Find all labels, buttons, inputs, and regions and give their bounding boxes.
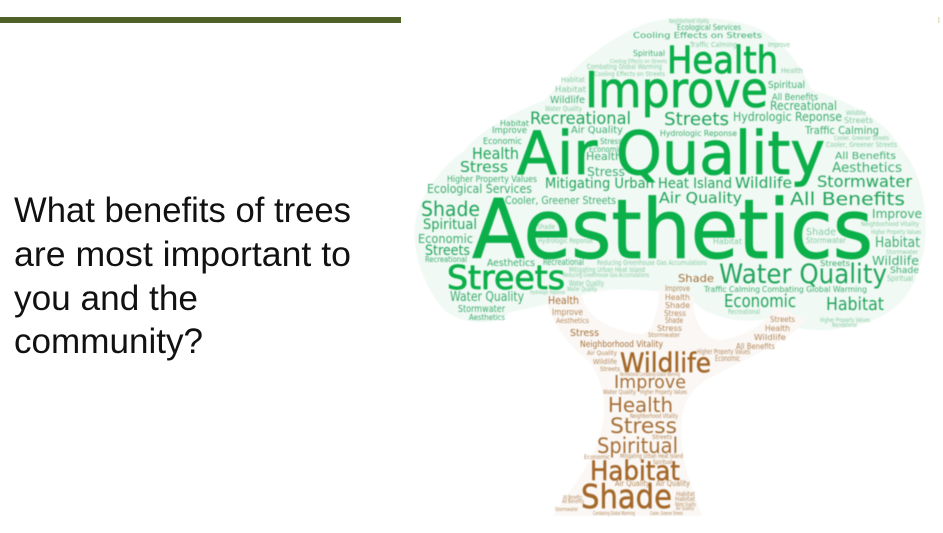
trunk small keywords: Higher Property Values — [640, 389, 687, 396]
canopy secondary keywords: Water Quality — [450, 290, 524, 305]
canopy secondary keywords: Stress — [600, 137, 622, 146]
canopy secondary keywords: Recreational — [425, 255, 467, 264]
canopy secondary keywords: Economic — [483, 137, 522, 147]
canopy small keywords: Recreational — [832, 322, 857, 329]
canopy small keywords: Shade — [806, 227, 836, 238]
canopy secondary keywords: Improve — [492, 126, 527, 136]
trunk small keywords: Combating Global Warming — [593, 511, 635, 517]
trunk small keywords: Air Quality — [587, 350, 617, 357]
canopy medium keywords: Recreational — [530, 109, 631, 129]
canopy secondary keywords: Traffic Calming — [703, 285, 760, 294]
trunk small keywords: Improve — [665, 284, 690, 293]
trunk large keywords: Wildlife — [620, 348, 711, 379]
trunk small keywords: All Benefits — [736, 342, 775, 351]
trunk small keywords: Air Quality — [656, 479, 690, 488]
canopy small keywords: Reducing Greenhouse Gas Accumulations — [597, 259, 707, 267]
canopy small keywords: Spiritual — [887, 274, 913, 283]
trunk small keywords: Economic — [715, 354, 740, 363]
trunk small keywords: Air Quality — [615, 479, 650, 488]
trunk small keywords: Stormwater — [648, 332, 680, 339]
canopy small keywords: Health — [781, 67, 803, 75]
trunk small keywords: Higher Property Values — [697, 348, 750, 356]
canopy secondary keywords: All Benefits — [835, 151, 896, 162]
trunk small keywords: Air Quality — [676, 506, 694, 512]
canopy large keywords — [447, 39, 873, 297]
canopy large keywords: Aesthetics — [472, 183, 873, 278]
canopy large keywords: Streets — [447, 258, 565, 297]
canopy secondary keywords: Higher Property Values — [447, 175, 537, 185]
canopy medium keywords: Wildlife — [735, 174, 792, 192]
trunk large keywords: Habitat — [590, 456, 680, 487]
trunk medium keywords: Stress — [570, 328, 599, 339]
canopy secondary keywords: Ecological Services — [427, 182, 532, 196]
canopy small keywords: Higher Property Values — [820, 317, 870, 324]
trunk small keywords: Health — [665, 293, 690, 302]
trunk small keywords: Streets — [770, 315, 795, 324]
canopy small keywords: Habitat — [555, 85, 586, 94]
canopy small keywords: Wildlife — [846, 110, 866, 117]
trunk small keywords: Shade — [665, 301, 690, 310]
heading question: community? — [14, 322, 203, 361]
canopy secondary keywords: Air Quality — [571, 125, 623, 136]
canopy secondary keywords: Wildlife — [872, 254, 919, 268]
canopy small keywords: Traffic Calming — [689, 41, 737, 49]
canopy small keywords: Water Quality — [567, 286, 597, 293]
canopy small keywords: Recreational — [728, 308, 760, 316]
canopy secondary keywords: Recreational — [543, 258, 584, 268]
canopy medium keywords: All Benefits — [790, 189, 905, 210]
trunk medium keywords: Health — [608, 393, 673, 417]
top accent bar — [0, 17, 401, 23]
canopy medium keywords: Streets — [425, 243, 470, 259]
canopy medium keywords: Shade — [421, 197, 480, 221]
canopy large keywords: Air Quality — [517, 119, 825, 189]
canopy small keywords: Hydrologic Reponse — [530, 290, 565, 296]
canopy secondary keywords: Health — [586, 150, 622, 163]
canopy secondary keywords: Recreational — [770, 99, 837, 113]
small corner mark — [938, 17, 940, 23]
canopy secondary keywords: Hydrologic Reponse — [733, 110, 842, 124]
canopy secondary keywords: Stormwater — [458, 304, 506, 315]
trunk small keywords: Neighborhood Vitality — [630, 413, 678, 420]
trunk small keywords: Improve — [552, 308, 583, 318]
trunk small keywords: Spiritual — [653, 459, 672, 466]
trunk small keywords: Aesthetics — [556, 317, 589, 325]
trunk small keywords: Streets — [600, 366, 620, 373]
trunk medium keywords: Health — [548, 294, 579, 307]
canopy secondary keywords: Cooler, Greener Streets — [505, 194, 616, 207]
trunk small keywords: Water Quality — [675, 502, 696, 508]
trunk small keywords: Shade — [665, 316, 683, 325]
tree trunk shape — [545, 288, 806, 516]
canopy secondary keywords: Habitat — [500, 119, 529, 128]
trunk small keywords: Stormwater — [555, 507, 579, 513]
canopy small keywords: Combating Global Warming — [587, 63, 662, 71]
canopy medium keywords: Air Quality — [659, 189, 742, 207]
trunk small keywords: Habitat — [676, 491, 696, 498]
heading question: you and the — [14, 279, 198, 318]
trunk large keywords — [581, 348, 711, 516]
canopy secondary keywords: Aesthetics — [487, 258, 535, 269]
canopy small keywords: Cooling Effects on Streets — [610, 59, 667, 65]
canopy secondary keywords: All Benefits — [772, 93, 818, 103]
trunk small keywords: Habitat — [675, 496, 696, 503]
trunk medium keywords: Stress — [610, 414, 677, 438]
canopy small keywords: Hydrologic Reponse — [538, 237, 593, 245]
tree word cloud — [415, 18, 926, 517]
canopy medium keywords: Streets — [664, 109, 729, 130]
trunk small keywords: Wildlife — [593, 358, 617, 366]
canopy secondary keywords: Hydrologic Reponse — [660, 129, 737, 138]
trunk small keywords: Economic — [584, 454, 610, 461]
canopy secondary keywords — [418, 23, 922, 322]
trunk medium keywords: Spiritual — [597, 434, 678, 458]
trunk small keywords — [552, 284, 795, 517]
canopy small keywords: Higher Property Values — [871, 229, 921, 236]
canopy secondary keywords: Improve — [872, 207, 922, 221]
canopy secondary keywords: Shade — [890, 266, 919, 276]
canopy medium keywords: Water Quality — [719, 259, 887, 290]
canopy medium keywords: Health — [472, 144, 519, 163]
trunk small keywords: All Benefits — [562, 499, 584, 505]
canopy small keywords: Stormwater — [806, 236, 847, 245]
canopy small keywords: Habitat — [561, 76, 585, 84]
canopy secondary keywords: Habitat — [875, 235, 920, 251]
canopy small keywords: Stormwater — [886, 249, 918, 256]
trunk medium keywords — [548, 272, 714, 458]
canopy secondary keywords: Aesthetics — [469, 313, 505, 322]
canopy secondary keywords: Spiritual — [633, 49, 665, 58]
heading question: are most important to — [14, 235, 351, 274]
trunk small keywords: Health — [765, 324, 790, 333]
canopy secondary keywords: Combating Global Warming — [762, 285, 867, 294]
canopy secondary keywords: Economic — [418, 232, 473, 246]
canopy small keywords: Shade — [537, 223, 555, 231]
canopy small keywords: Cooler, Greener Streets — [826, 141, 897, 149]
trunk medium keywords: Shade — [678, 272, 714, 285]
canopy secondary keywords: Streets — [820, 259, 850, 268]
canopy secondary keywords: Cooling Effects on Streets — [633, 31, 762, 40]
canopy small keywords: Cooling Effects on Streets — [594, 71, 665, 78]
canopy small keywords: Improve — [768, 41, 790, 49]
canopy small keywords: Neighborhood Vitality — [669, 18, 709, 25]
canopy small keywords: Streets — [844, 116, 873, 125]
canopy medium keywords: Mitigating Urban Heat Island — [545, 176, 732, 192]
trunk large keywords: Shade — [581, 477, 672, 516]
canopy small keywords — [530, 18, 921, 329]
canopy secondary keywords: Stress — [587, 165, 625, 179]
trunk small keywords: Stress — [657, 324, 682, 333]
canopy secondary keywords: Spiritual — [768, 80, 805, 91]
canopy small keywords: Cooler, Greener Streets — [834, 135, 889, 142]
trunk small keywords: Recreational Combating Global Warming — [620, 372, 680, 378]
trunk medium keywords: Improve — [614, 372, 686, 393]
trunk small keywords: Water Quality — [603, 389, 636, 396]
canopy large keywords: Improve — [585, 62, 768, 119]
trunk small keywords: Wildlife — [754, 333, 786, 342]
trunk small keywords: All Benefits — [563, 495, 582, 501]
canopy secondary keywords: Aesthetics — [832, 161, 902, 176]
canopy medium keywords — [421, 109, 912, 315]
canopy medium keywords: Habitat — [826, 294, 884, 315]
canopy secondary keywords: Ecological Services — [677, 23, 741, 32]
canopy small keywords: Neighborhood Vitality — [861, 221, 919, 228]
trunk small keywords: Cooler, Greener Streets — [650, 511, 683, 517]
trunk small keywords: Streets — [652, 434, 672, 441]
canopy small keywords: Water Quality — [569, 279, 604, 288]
trunk small keywords: Mitigating Urban Heat Island — [620, 453, 683, 460]
trunk medium keywords: Neighborhood Vitality — [580, 340, 664, 350]
canopy medium keywords: Stormwater — [817, 172, 912, 191]
heading question — [14, 191, 351, 361]
canopy medium keywords: Economic — [724, 291, 796, 312]
canopy secondary keywords: Traffic Calming — [804, 124, 879, 137]
canopy secondary keywords: Wildlife — [550, 95, 585, 106]
canopy medium keywords: Stress — [460, 158, 508, 176]
canopy secondary keywords: Economic — [589, 145, 622, 154]
heading question: What benefits of trees — [14, 191, 351, 230]
canopy small keywords: Reducing Greenhouse Gas Accumulations — [563, 272, 649, 279]
canopy small keywords: Water Quality — [545, 105, 582, 113]
tree canopy shape — [415, 18, 926, 330]
trunk small keywords: Stress — [664, 309, 686, 318]
canopy small keywords: Habitat — [713, 237, 742, 246]
canopy medium keywords: Spiritual — [423, 217, 477, 233]
canopy small keywords: Mitigating Urban Heat Island — [569, 266, 645, 274]
canopy large keywords: Health — [667, 39, 778, 82]
